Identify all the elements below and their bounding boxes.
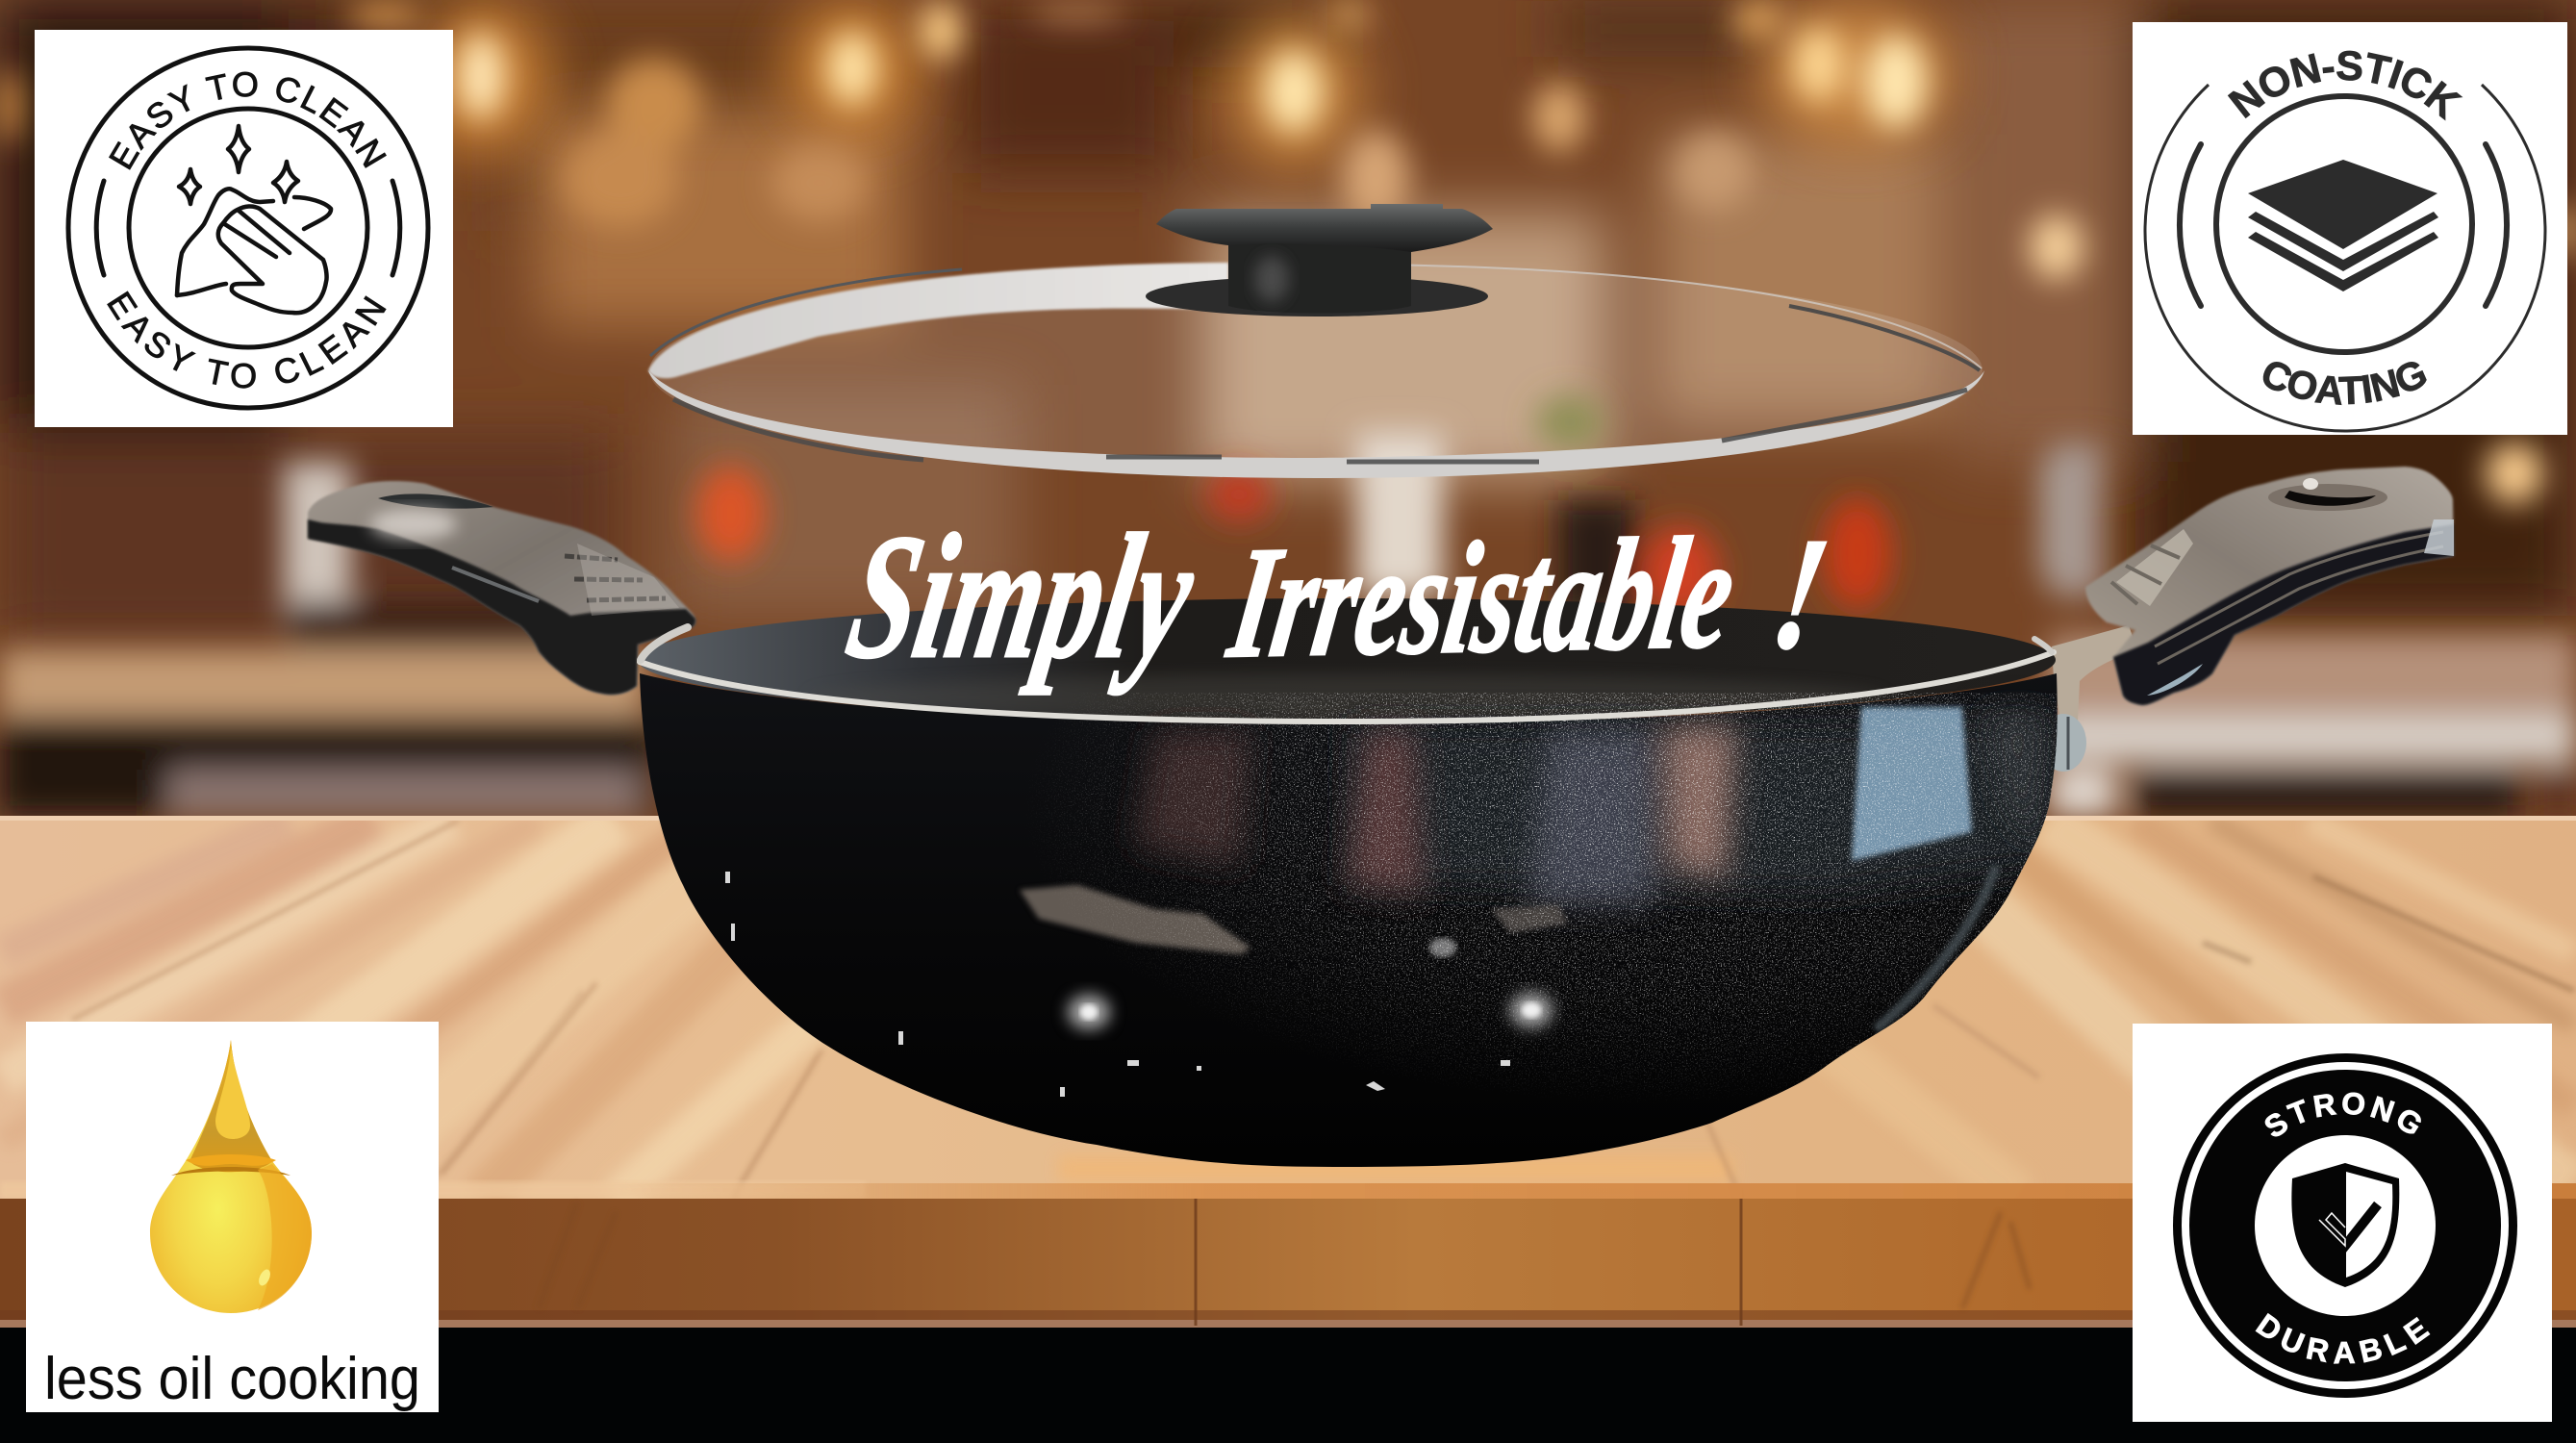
background: blurred kitchen [0, 0, 2576, 816]
badge: easy to clean rings [68, 48, 428, 408]
glass lid [648, 263, 1984, 478]
wooden table top [0, 816, 2576, 1199]
panel: strong durable [2133, 1024, 2552, 1422]
badge text: coating: COATING [2262, 362, 2427, 406]
pan: interior [638, 598, 2056, 722]
badge text: strong: STRONG [2264, 1093, 2421, 1137]
panel: less oil cooking [26, 1022, 439, 1412]
icon: hand wiping with sparkles [177, 126, 331, 313]
icon: shield with check [2291, 1163, 2399, 1287]
pan: left handle [308, 481, 695, 695]
pan: body [635, 673, 2068, 1174]
title: ! [1762, 505, 1839, 681]
black bottom strip [0, 1328, 2576, 1443]
label: less oil cooking: less oil cooking [44, 1346, 420, 1412]
title: Irresistable [1219, 504, 1746, 691]
lid knob [1146, 204, 1493, 316]
title [836, 498, 1839, 696]
badge text: bottom: EASY TO CLEAN [107, 291, 387, 389]
badge text: top: EASY TO CLEAN [109, 71, 387, 170]
icon: coating layers [2248, 160, 2438, 291]
badge: non-stick rings [2145, 85, 2545, 431]
badge: strong durable disc [2173, 1053, 2517, 1398]
panel: easy to clean [35, 30, 453, 427]
icon: oil drop [150, 1040, 312, 1313]
panel: non-stick coating [2133, 22, 2567, 435]
pan: rim [640, 627, 2054, 722]
pan: right handle [2040, 467, 2454, 772]
table front edge [0, 1199, 2576, 1328]
badge text: durable: DURABLE [2255, 1312, 2430, 1364]
title: Simply [836, 498, 1208, 696]
badge text: non-stick: NON-STICK [2228, 50, 2462, 121]
